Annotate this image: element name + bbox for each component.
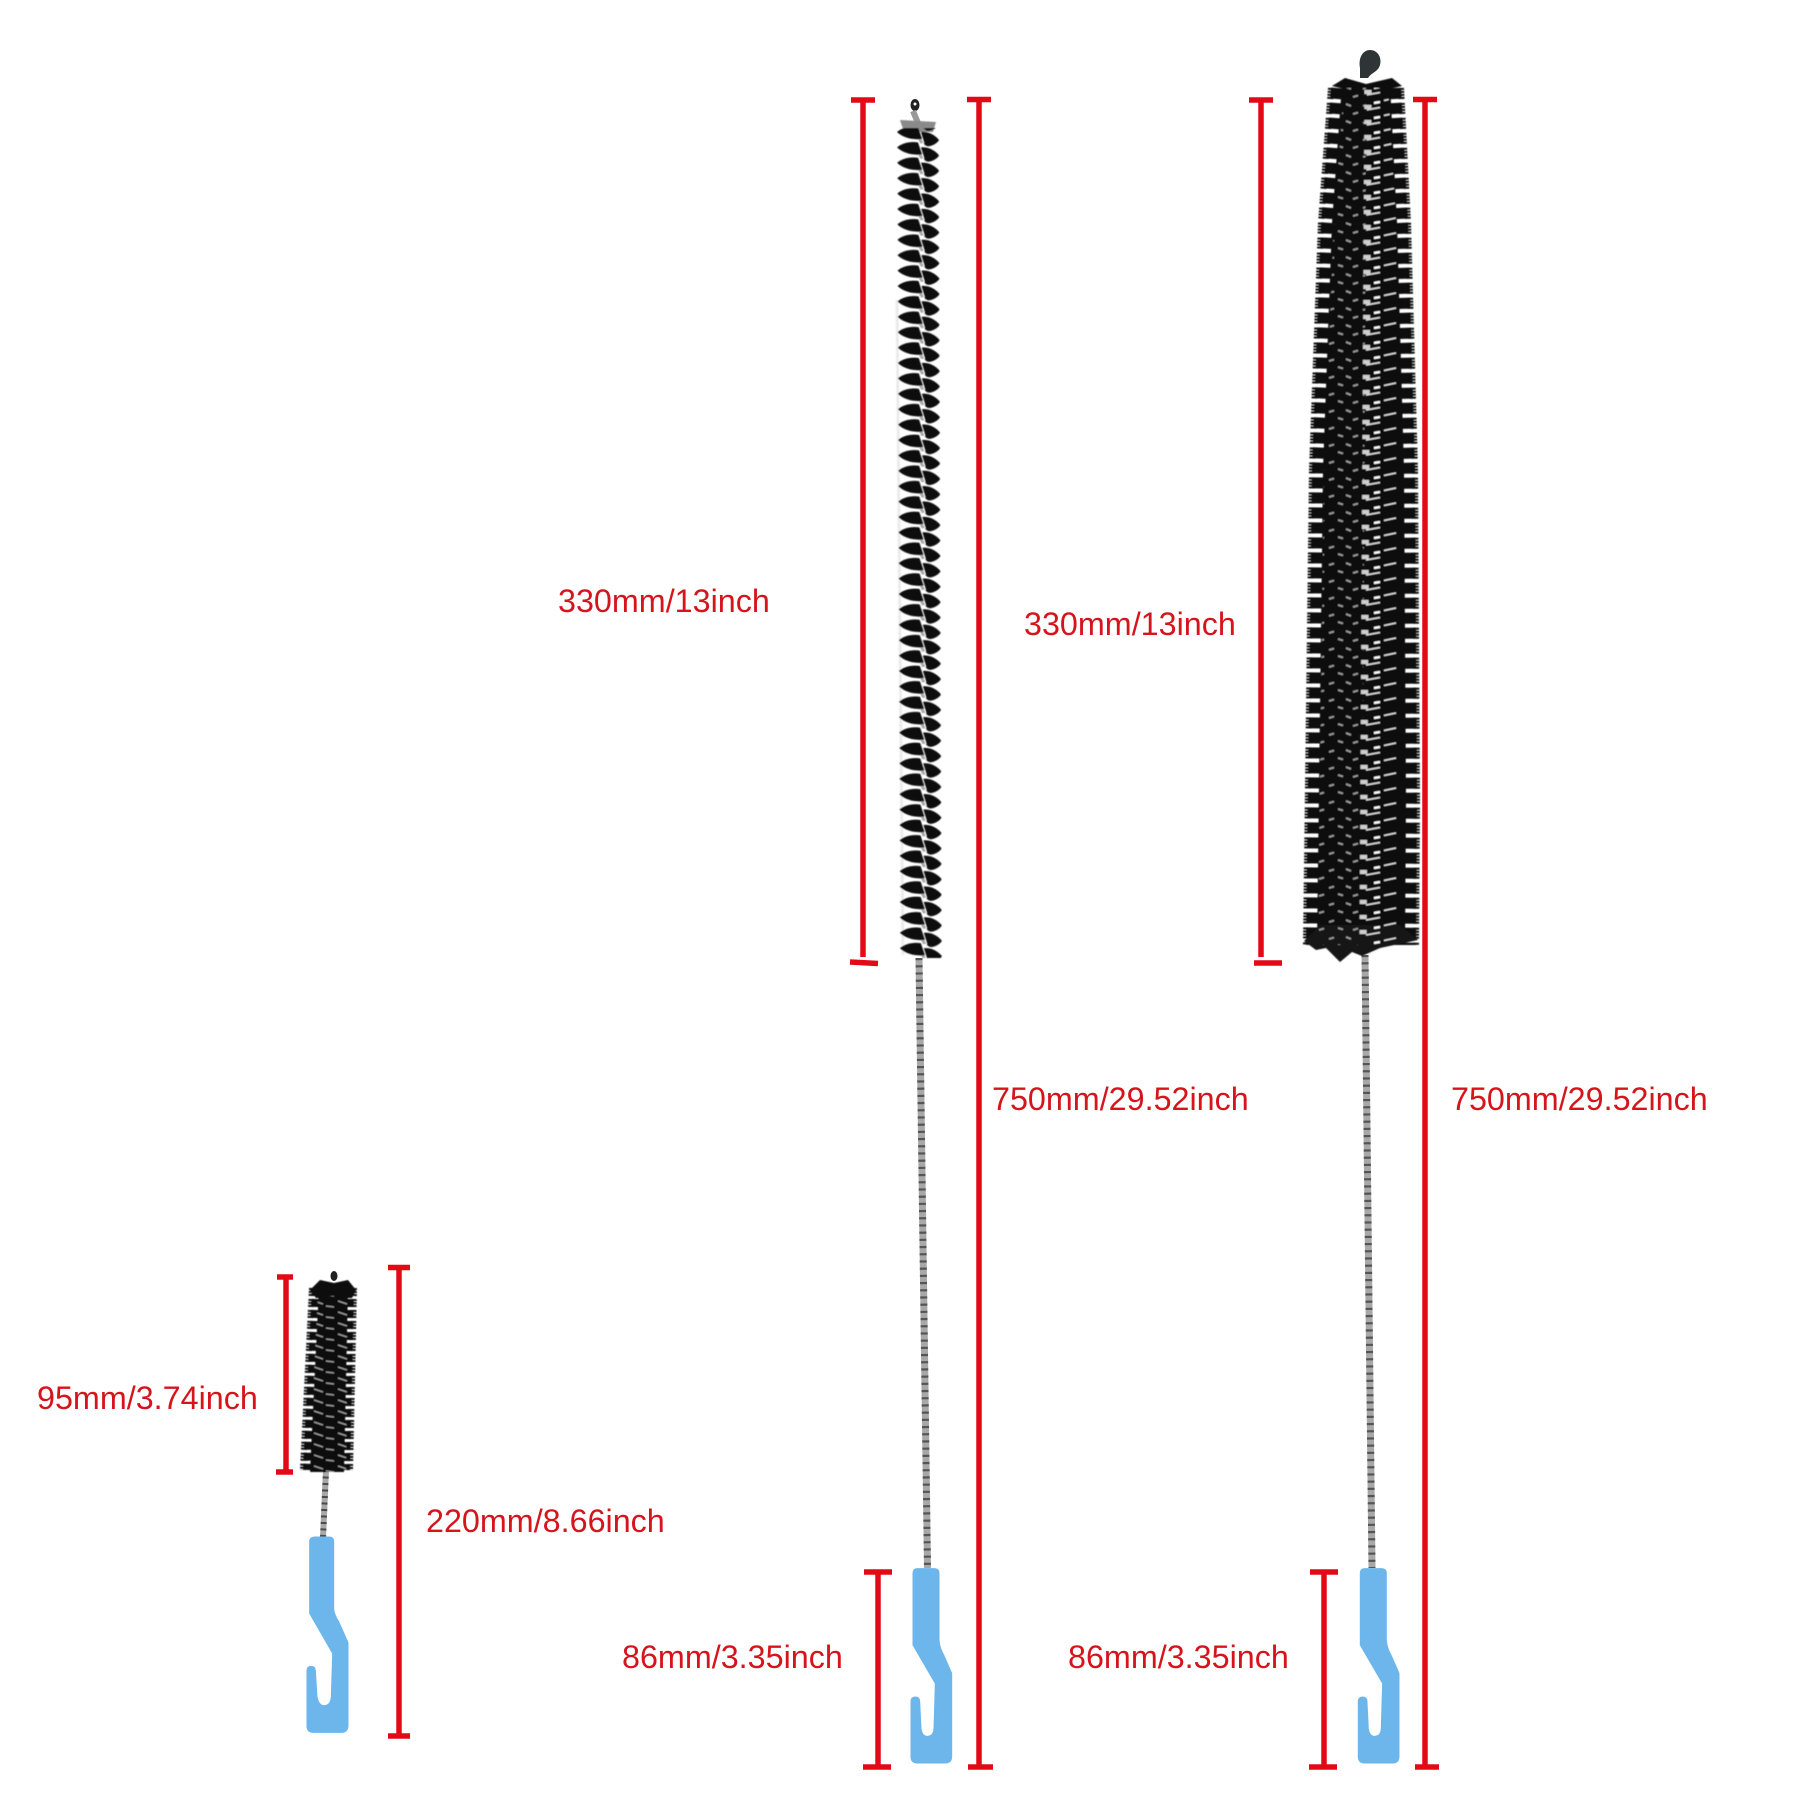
label: medium brush handle: 86mm/3.35inch xyxy=(622,1639,843,1675)
large brush loop tip xyxy=(1360,50,1381,78)
label: small brush head: 95mm/3.74inch xyxy=(37,1380,258,1416)
medium brush xyxy=(897,99,951,1763)
small brush loop tip xyxy=(330,1271,338,1281)
dimension bar: small 95mm xyxy=(276,1277,293,1472)
label: large brush total: 750mm/29.52inch xyxy=(1451,1081,1708,1117)
large brush bristles xyxy=(1304,78,1418,962)
label: medium brush head: 330mm/13inch xyxy=(558,583,770,619)
dimension bar: medium 86mm xyxy=(863,1572,892,1767)
small brush xyxy=(303,1271,356,1732)
medium brush wire xyxy=(919,958,928,1568)
large brush blue hook handle xyxy=(1359,1569,1399,1763)
large brush wire xyxy=(1365,955,1372,1568)
label: large brush handle: 86mm/3.35inch xyxy=(1068,1639,1289,1675)
dimension bar: large 750mm xyxy=(1413,99,1439,1767)
dimension bar: large 330mm xyxy=(1249,100,1282,963)
dimension bar: medium 750mm xyxy=(967,99,993,1767)
dimension bar: small 220mm xyxy=(388,1267,410,1736)
large brush xyxy=(1304,50,1418,1763)
medium brush loop tip xyxy=(910,99,920,128)
label: small brush total: 220mm/8.66inch xyxy=(426,1503,665,1539)
small brush wire xyxy=(323,1470,326,1538)
dimension bar: large 86mm xyxy=(1309,1572,1338,1767)
label: large brush head: 330mm/13inch xyxy=(1024,606,1236,642)
label: medium brush total: 750mm/29.52inch xyxy=(992,1081,1249,1117)
medium brush blue hook handle xyxy=(911,1569,951,1763)
medium brush bristles xyxy=(897,120,942,958)
small brush bristles xyxy=(303,1280,356,1472)
dimension bar: medium 330mm xyxy=(850,100,878,964)
small brush blue hook handle xyxy=(307,1537,348,1732)
